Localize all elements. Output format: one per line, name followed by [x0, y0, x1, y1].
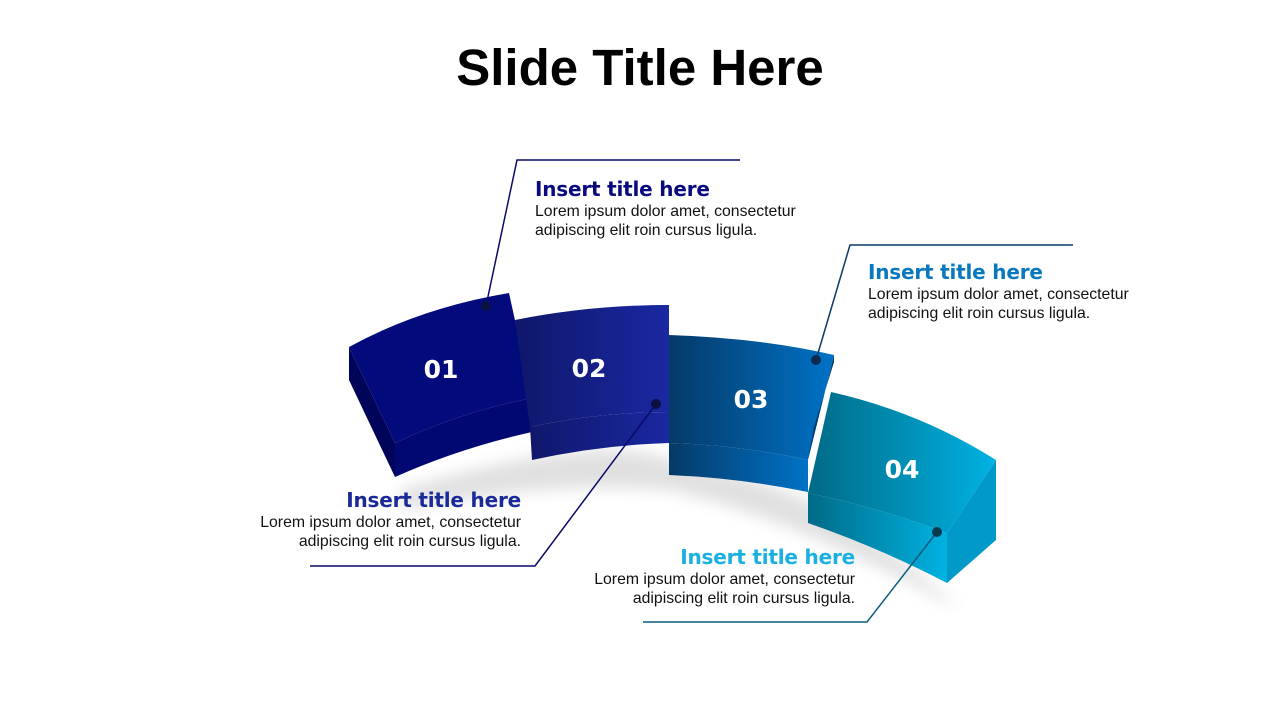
segment 01 [349, 293, 532, 477]
callout 1 text: adipiscing elit roin cursus ligula. [535, 222, 757, 239]
segment 04: 04 [885, 455, 919, 484]
callout 3 text: adipiscing elit roin cursus ligula. [868, 305, 1090, 322]
callout 2 text: Insert title here [346, 488, 521, 512]
callout 2 text: adipiscing elit roin cursus ligula. [299, 533, 521, 550]
segment 04 [808, 392, 996, 583]
callout 3 text [868, 260, 1129, 322]
segment 02: 02 [572, 354, 606, 383]
callout 3 text: Lorem ipsum dolor amet, consectetur [868, 286, 1129, 303]
callout 1 text: Insert title here [535, 177, 710, 201]
segment 03: 03 [734, 385, 768, 414]
callout 4 text: Insert title here [680, 545, 855, 569]
segment 03 [669, 335, 834, 492]
callout 4 text: Lorem ipsum dolor amet, consectetur [594, 571, 855, 588]
callout 2 text: Lorem ipsum dolor amet, consectetur [260, 514, 521, 531]
callout line 1 [481, 160, 740, 311]
callout line 3 [811, 245, 1073, 365]
shadow [400, 450, 960, 610]
callout 1 text: Lorem ipsum dolor amet, consectetur [535, 203, 796, 220]
segment 02 [515, 305, 669, 460]
callout line 2 [310, 399, 661, 566]
callout 3 text: Insert title here [868, 260, 1043, 284]
callout 4 text [594, 545, 855, 607]
title: Slide Title Here [456, 39, 824, 96]
callout 4 text: adipiscing elit roin cursus ligula. [633, 590, 855, 607]
segment 01: 01 [424, 355, 458, 384]
callout line 4 [643, 527, 942, 622]
callout 2 text [260, 488, 521, 550]
callout 1 text [535, 177, 796, 239]
